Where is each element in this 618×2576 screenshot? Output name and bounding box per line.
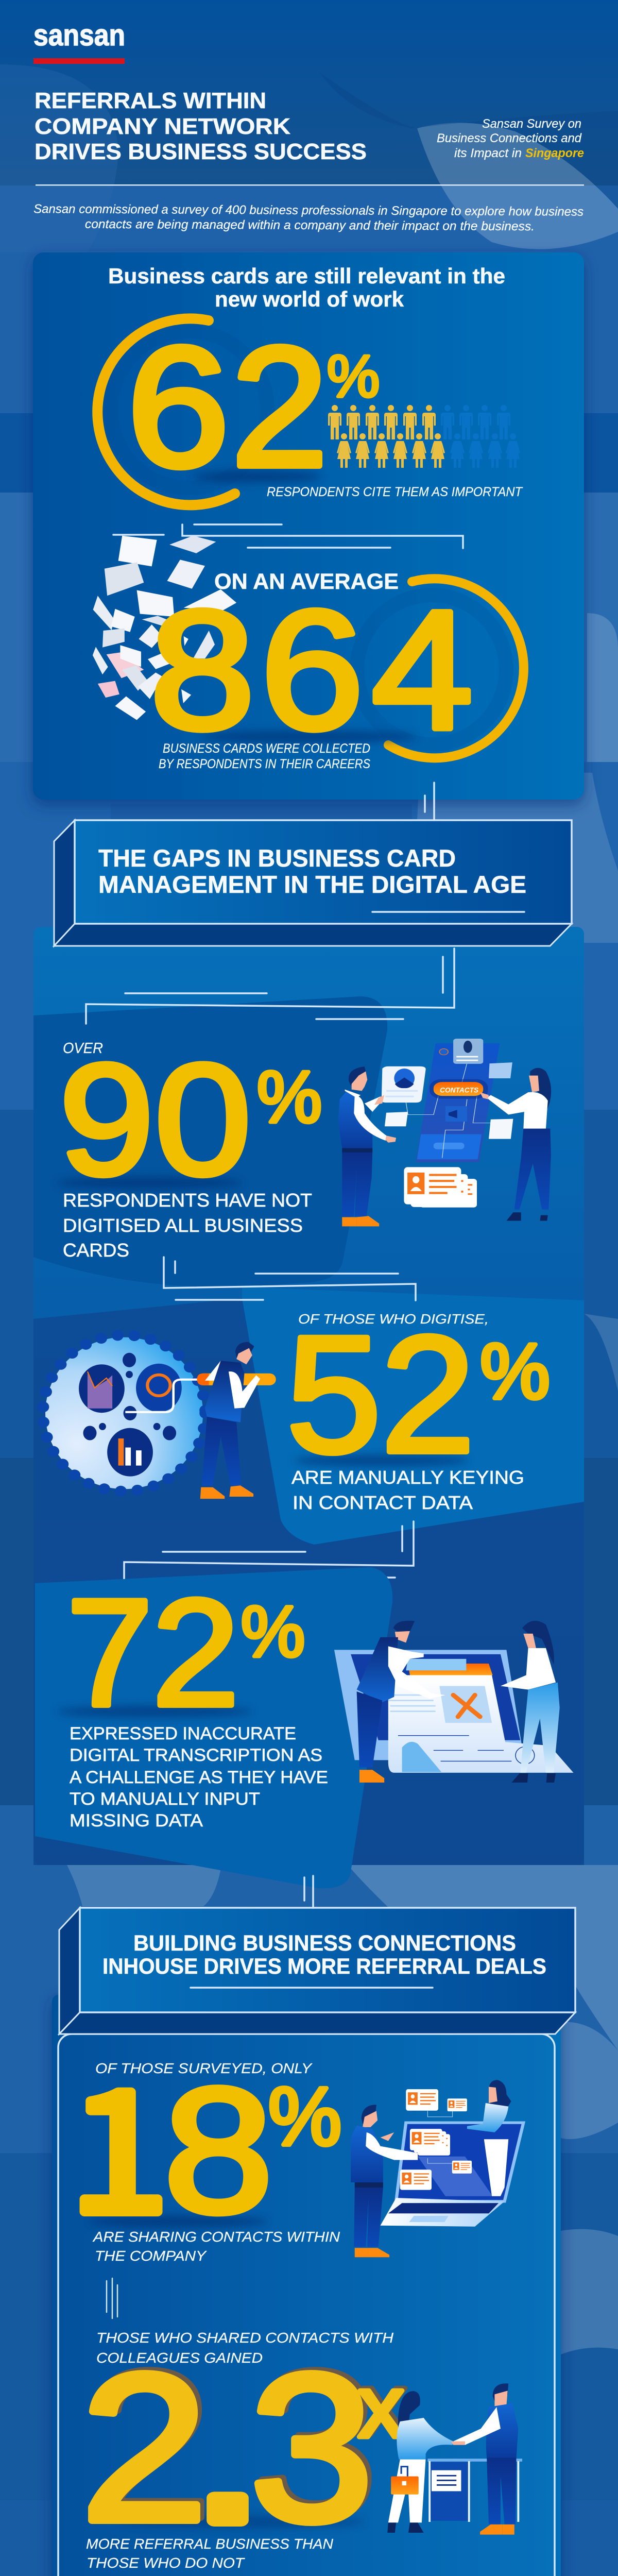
contacts button <box>430 1079 488 1099</box>
stat: 90 percent <box>59 1031 322 1208</box>
stat: 52 percent: 2 <box>381 1302 475 1487</box>
stat: 2.3x: . <box>190 2331 266 2565</box>
label: of those who digitise: OF THOSE WHO DIGITISE, <box>298 1311 489 1327</box>
caption 72: TO MANUALLY INPUT <box>70 1789 260 1809</box>
label: over: OVER <box>63 1040 103 1057</box>
connector lines <box>86 948 454 1024</box>
stat: 62 percent: % <box>327 344 380 410</box>
panel: gaps in business card management <box>33 927 584 1888</box>
panel heading <box>108 264 505 311</box>
stat: 18 percent: % <box>268 2070 341 2162</box>
label: of those surveyed: OF THOSE SURVEYED, ONLY <box>95 2060 313 2076</box>
stat: 52 percent: 5 <box>286 1301 382 1487</box>
caption 18: THE COMPANY <box>95 2248 207 2264</box>
stat: 72 percent <box>57 1567 305 1738</box>
arc around 62 <box>97 318 267 505</box>
stat: 72 percent: % <box>241 1591 305 1672</box>
stat: 90 percent: 0 <box>154 1031 251 1208</box>
caption 864: BY RESPONDENTS IN THEIR CAREERS <box>159 757 370 771</box>
stat: 2.3x: x <box>358 2358 404 2455</box>
caption 18 <box>92 2229 340 2264</box>
title: REFERRALS WITHIN <box>35 88 266 113</box>
logo <box>33 19 125 64</box>
shadow under 90 <box>57 1177 242 1189</box>
stat: 18 percent: 8 <box>164 2052 273 2250</box>
caption 72 <box>70 1724 328 1831</box>
label: those who shared contacts: COLLEAGUES GAINED <box>96 2350 263 2366</box>
stat: 90 percent: 9 <box>59 1031 154 1208</box>
illustration: man, woman and laptop <box>351 2080 523 2257</box>
connector to building header <box>304 1876 313 1908</box>
stat: 2.3x <box>80 2327 407 2565</box>
subtitle: Business Connections and <box>437 131 582 145</box>
caption 864: BUSINESS CARDS WERE COLLECTED <box>163 741 370 756</box>
subtitle <box>437 117 584 160</box>
caption 2.3x: THOSE WHO DO NOT <box>87 2555 245 2571</box>
caption 2.3x <box>86 2536 334 2571</box>
caption 72: EXPRESSED INACCURATE <box>70 1724 296 1743</box>
stat: 2.3x: x <box>361 2355 407 2453</box>
label: those who shared contacts <box>96 2330 394 2366</box>
people icons <box>328 405 520 468</box>
intro text <box>33 202 583 234</box>
arc around 864 <box>357 579 524 758</box>
illustration: colleagues with phone contacts <box>338 1039 551 1226</box>
stat: 2.3x: 2 <box>84 2328 212 2562</box>
stat: 62 percent <box>127 311 380 502</box>
section header: gaps: THE GAPS IN BUSINESS CARD <box>98 844 456 872</box>
connector lines <box>113 524 463 548</box>
caption 72: DIGITAL TRANSCRIPTION AS <box>70 1745 322 1765</box>
lighter shape behind 52 percent <box>242 1287 584 1545</box>
stat: 90 percent: % <box>257 1056 322 1138</box>
contacts button: CONTACTS <box>440 1086 478 1094</box>
stat: 2.3x: 3 <box>254 2327 377 2562</box>
panel: building connections <box>52 1994 561 2576</box>
intro text: Sansan commissioned a survey of 400 business professionals in Singapore to explore how business <box>33 202 583 219</box>
stat: 18 percent <box>68 2016 341 2260</box>
logo: sansan <box>33 19 125 52</box>
caption 864 <box>159 741 370 771</box>
title: DRIVES BUSINESS SUCCESS <box>35 139 367 164</box>
caption 90: DIGITISED ALL BUSINESS <box>63 1215 303 1236</box>
panel heading: Business cards are still relevant in the <box>108 264 505 288</box>
illustration: gear and man <box>43 1335 276 1499</box>
stat: 864: 8 <box>150 575 255 765</box>
caption 52: IN CONTACT DATA <box>293 1492 473 1513</box>
connector lines <box>164 1257 416 1300</box>
intro text: contacts are being managed within a company and their impact on the business. <box>85 217 535 233</box>
stat: 62 percent: 6 <box>127 312 229 502</box>
caption 90: CARDS <box>63 1240 129 1261</box>
lower left dark shape <box>33 1298 584 1865</box>
subtitle: its Impact in <box>454 146 522 160</box>
caption 18: ARE SHARING CONTACTS WITHIN <box>92 2229 340 2245</box>
stat: 72 percent: 2 <box>152 1567 239 1738</box>
title <box>35 88 367 164</box>
subtitle: Sansan Survey on <box>482 117 581 131</box>
section header: gaps: MANAGEMENT IN THE DIGITAL AGE <box>98 871 526 898</box>
panel heading: new world of work <box>215 287 404 311</box>
stat: 52 percent <box>286 1301 550 1487</box>
stat: 62 percent: 2 <box>231 311 328 502</box>
caption 72: A CHALLENGE AS THEY HAVE <box>70 1768 328 1787</box>
caption 52 <box>291 1467 524 1513</box>
stat: 2.3x: 3 <box>250 2330 373 2565</box>
illustration: colleagues reviewing form <box>334 1621 574 1783</box>
caption 72: MISSING DATA <box>70 1811 203 1831</box>
subtitle: Singapore <box>525 146 584 160</box>
caption 90 <box>63 1190 312 1261</box>
title: COMPANY NETWORK <box>35 114 290 139</box>
stat: 18 percent: 1 <box>68 2016 169 2260</box>
heading: on an average: ON AN AVERAGE <box>214 569 399 594</box>
caption 90: RESPONDENTS HAVE NOT <box>63 1190 312 1211</box>
illustration: handshake at table <box>387 2383 522 2535</box>
section header: building connections <box>59 1908 575 2034</box>
stat: 864: 4 <box>371 575 473 765</box>
stat: 864 <box>150 575 473 765</box>
label: those who shared contacts: THOSE WHO SHARED CONTACTS WITH <box>96 2330 394 2346</box>
stat: 864: 6 <box>260 575 364 765</box>
stat: 72 percent: 7 <box>66 1568 153 1738</box>
connector to gaps header <box>425 783 434 820</box>
caption 52: ARE MANUALLY KEYING <box>291 1467 524 1488</box>
background shape behind 90 percent <box>33 996 387 1287</box>
decorative lines <box>107 2278 117 2318</box>
section header: gaps <box>54 820 572 946</box>
icon: flying business cards <box>93 536 236 720</box>
section header: building connections: BUILDING BUSINESS CONNECTIONS <box>133 1931 516 1956</box>
connector lines <box>124 1521 414 1583</box>
stat: 52 percent: % <box>480 1328 550 1415</box>
panel: business cards still relevant <box>33 252 584 800</box>
caption 2.3x: MORE REFERRAL BUSINESS THAN <box>86 2536 334 2552</box>
stat: 2.3x: 2 <box>80 2331 208 2565</box>
section header: building connections: INHOUSE DRIVES MORE REFERRAL DEALS <box>102 1954 546 1979</box>
caption 62: RESPONDENTS CITE THEM AS IMPORTANT <box>267 485 523 499</box>
shape behind 72 percent <box>35 1567 392 1888</box>
